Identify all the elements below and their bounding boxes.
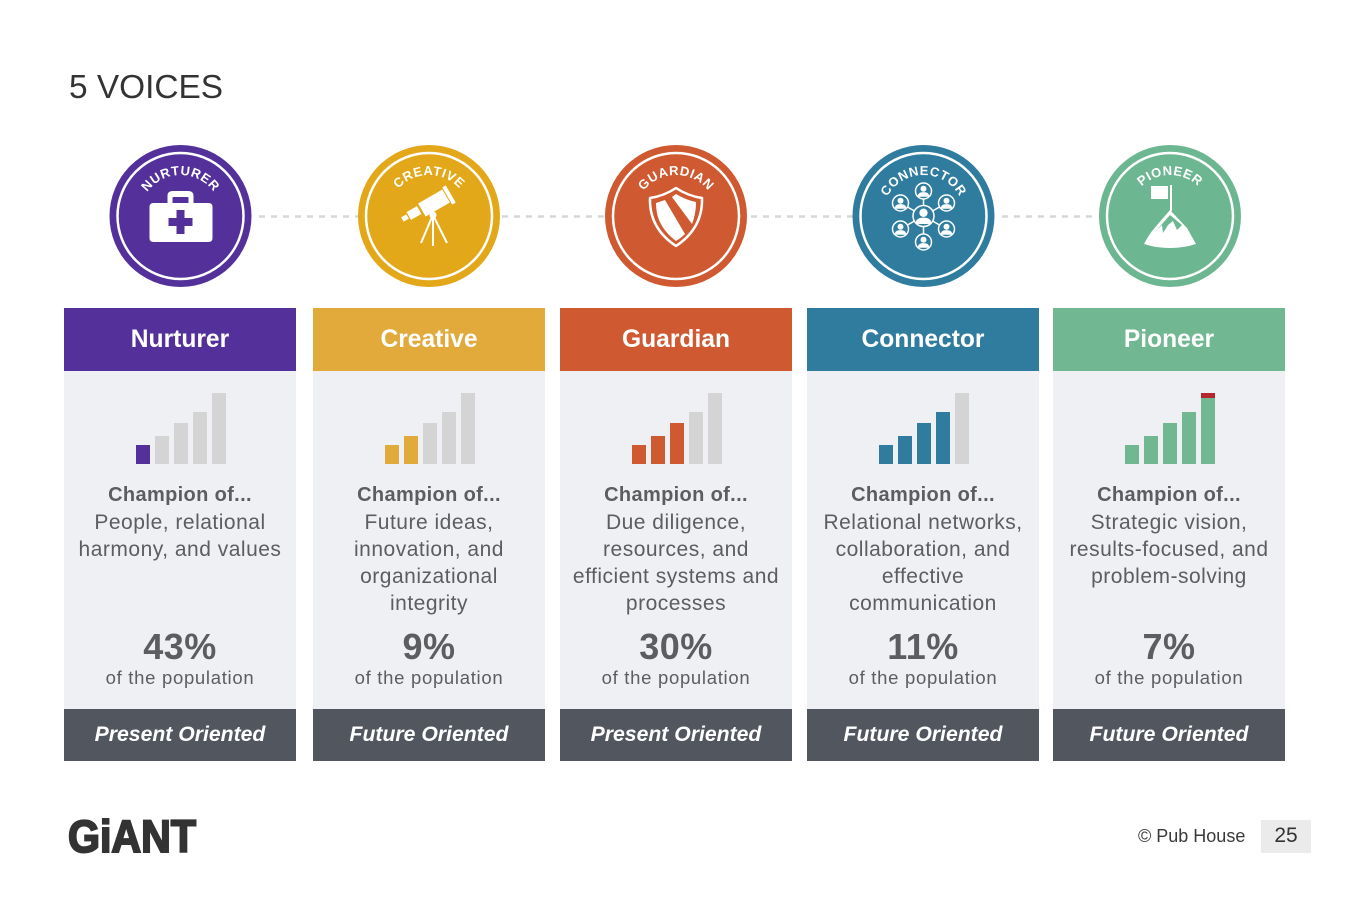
text: champion description bbox=[823, 484, 1023, 615]
heading: Creative: Creative bbox=[380, 326, 478, 353]
heading: Guardian bbox=[560, 308, 792, 370]
text: champion description: Future ideas, bbox=[364, 511, 494, 534]
text: champion description: Relational networks, bbox=[823, 511, 1023, 534]
footer: orientation bbox=[1053, 709, 1285, 761]
text: champion description: communication bbox=[849, 592, 997, 615]
text: champion description: Champion of... bbox=[357, 484, 501, 506]
footer: orientation: Future Oriented bbox=[350, 723, 508, 746]
badge row with connecting dotted lines bbox=[110, 145, 1241, 287]
heading: Connector: Connector bbox=[862, 326, 984, 353]
icon: people network bbox=[892, 183, 954, 250]
panel: Pioneer bbox=[1053, 308, 1285, 761]
heading: Creative bbox=[313, 308, 545, 370]
text: champion description: Champion of... bbox=[108, 484, 252, 506]
footer: orientation: Present Oriented bbox=[95, 723, 265, 746]
panel: Guardian bbox=[560, 308, 792, 761]
text: champion description bbox=[1069, 484, 1269, 588]
text: champion description: Champion of... bbox=[604, 484, 748, 506]
icon: medical case bbox=[150, 191, 212, 242]
badge: Connector bbox=[852, 145, 994, 287]
stat: 30%: 30% bbox=[639, 626, 713, 667]
bar chart: level 1 bbox=[136, 393, 226, 464]
stat: 7%: 7% bbox=[1142, 626, 1196, 667]
text: champion description: results-focused, and bbox=[1069, 538, 1269, 561]
text: champion description: harmony, and values bbox=[79, 538, 281, 561]
text: champion description: problem-solving bbox=[1091, 565, 1247, 588]
icon: shield bbox=[650, 188, 702, 246]
panel: Creative bbox=[313, 308, 545, 761]
text: champion description: Strategic vision, bbox=[1091, 511, 1247, 534]
badge: Connector: CONNECTOR bbox=[881, 166, 966, 196]
badge: Nurturer bbox=[110, 145, 252, 287]
stat: 9%: 9% bbox=[402, 626, 456, 667]
text: champion description: collaboration, and bbox=[836, 538, 1010, 561]
footer: orientation bbox=[313, 709, 545, 761]
text: champion description bbox=[354, 484, 504, 615]
footer: orientation bbox=[64, 709, 296, 761]
title: 5 VOICES bbox=[69, 69, 223, 106]
text: champion description: Champion of... bbox=[851, 484, 995, 506]
badge: Guardian bbox=[605, 145, 747, 287]
text: champion description: efficient systems and bbox=[573, 565, 779, 588]
caption: of the population bbox=[849, 667, 997, 688]
heading: Pioneer bbox=[1053, 308, 1285, 370]
heading: Pioneer: Pioneer bbox=[1124, 326, 1214, 353]
text: champion description: organizational bbox=[360, 565, 498, 588]
text: champion description: processes bbox=[626, 592, 726, 615]
panel: Nurturer bbox=[64, 308, 296, 761]
page number bbox=[1261, 820, 1311, 853]
heading: Connector bbox=[807, 308, 1039, 370]
footer: orientation: Future Oriented bbox=[844, 723, 1002, 746]
heading: Guardian: Guardian bbox=[622, 326, 730, 353]
text: champion description bbox=[573, 484, 779, 615]
footer: orientation: Present Oriented bbox=[591, 723, 761, 746]
bar chart: level 4 bbox=[879, 393, 969, 464]
panel: Connector bbox=[807, 308, 1039, 761]
text: champion description bbox=[79, 484, 281, 561]
text: champion description: innovation, and bbox=[354, 538, 504, 561]
badge: Creative bbox=[358, 145, 500, 287]
bar chart: level 3 bbox=[632, 393, 722, 464]
footer: orientation: Future Oriented bbox=[1090, 723, 1248, 746]
bar chart: level 5 bbox=[1125, 393, 1215, 464]
text: champion description: People, relational bbox=[94, 511, 266, 534]
caption: of the population bbox=[602, 667, 750, 688]
badge: Creative: CREATIVE bbox=[394, 166, 465, 188]
page number: 25 bbox=[1274, 824, 1298, 847]
stat: 43%: 43% bbox=[143, 626, 217, 667]
caption: of the population bbox=[106, 667, 254, 688]
badge: Guardian: GUARDIAN bbox=[638, 166, 714, 190]
text: champion description: Champion of... bbox=[1097, 484, 1241, 506]
text: champion description: effective bbox=[882, 565, 964, 588]
heading: Nurturer: Nurturer bbox=[131, 326, 229, 353]
badge: Pioneer bbox=[1099, 145, 1241, 287]
icon: flag on mountain bbox=[1144, 185, 1196, 248]
caption: of the population bbox=[355, 667, 503, 688]
footer: orientation bbox=[560, 709, 792, 761]
copyright: © Pub House bbox=[1138, 826, 1245, 846]
dotted connector lines bbox=[259, 215, 1098, 218]
text: champion description: resources, and bbox=[603, 538, 749, 561]
stat: 11%: 11% bbox=[887, 626, 959, 667]
caption: of the population bbox=[1095, 667, 1243, 688]
heading: Nurturer bbox=[64, 308, 296, 370]
text: champion description: Due diligence, bbox=[606, 511, 746, 534]
footer: orientation bbox=[807, 709, 1039, 761]
icon: telescope bbox=[401, 185, 456, 246]
text: champion description: integrity bbox=[390, 592, 468, 615]
badge: Pioneer: PIONEER bbox=[1136, 166, 1202, 186]
bar chart: level 2 bbox=[385, 393, 475, 464]
badge: Nurturer: NURTURER bbox=[140, 166, 219, 192]
